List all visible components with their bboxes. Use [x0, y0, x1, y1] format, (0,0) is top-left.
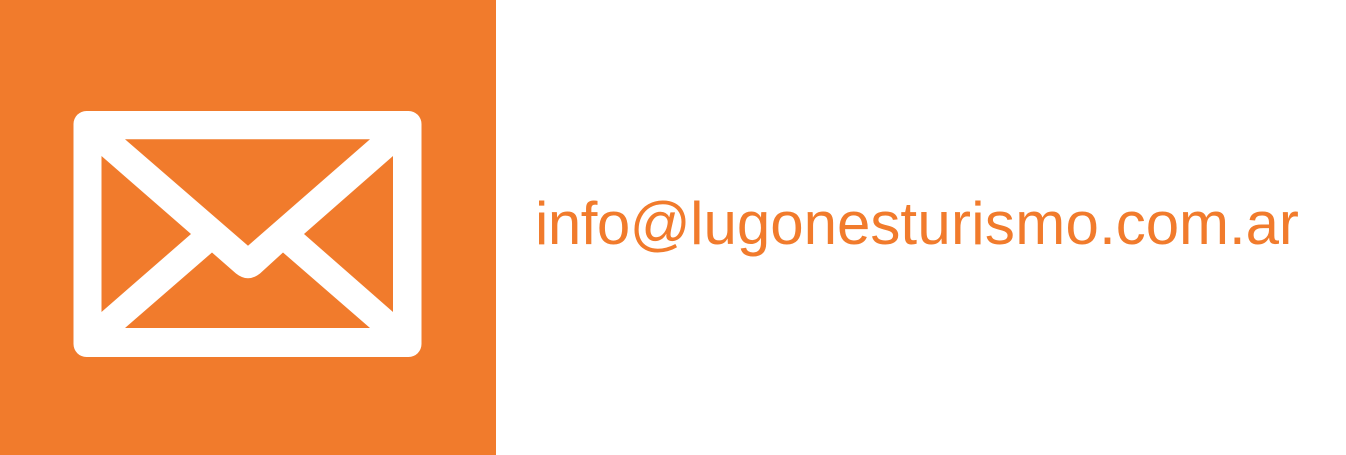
text: email address: info@lugonesturismo.com.ar — [535, 190, 1299, 257]
panel: orange icon background — [0, 0, 496, 455]
icon: envelope — [74, 111, 422, 357]
